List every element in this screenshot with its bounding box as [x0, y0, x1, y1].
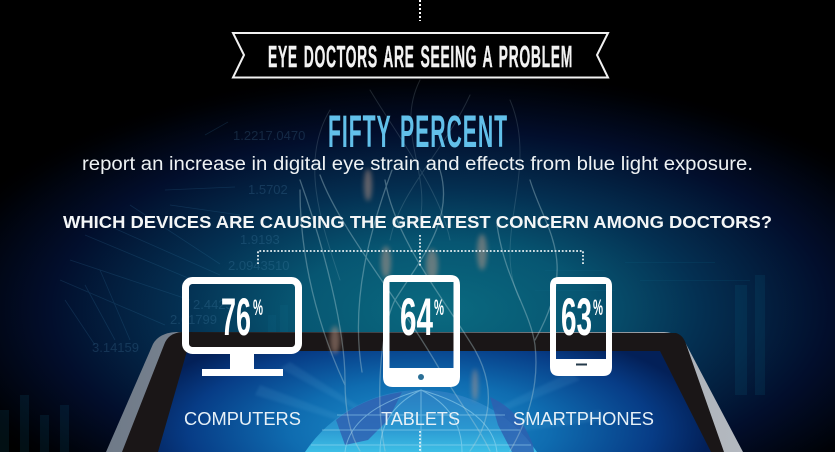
background data rays	[60, 122, 240, 345]
dotted bracket connector	[258, 235, 583, 266]
value: 64%: 64	[400, 288, 433, 347]
body text: report an increase in digital eye strain and effects from blue light exposure.	[82, 154, 753, 175]
label: computers: COMPUTERS	[184, 408, 301, 429]
screen light rays	[255, 362, 605, 445]
icon: tablet	[383, 275, 460, 387]
top dotted connector	[419, 0, 421, 21]
icon: monitor	[186, 280, 298, 376]
background faint numbers: 2.61799	[170, 312, 217, 327]
question heading: WHICH DEVICES ARE CAUSING THE GREATEST CONCERN AMONG DOCTORS?	[63, 212, 772, 232]
background faint numbers: 1.2217.0470	[233, 128, 305, 143]
background data bars	[0, 262, 765, 452]
background faint numbers: 1.5702	[248, 182, 288, 197]
label: smartphones: SMARTPHONES	[513, 408, 654, 429]
tablets stat	[381, 275, 460, 429]
lower dotted connector	[419, 431, 421, 452]
computers stat	[184, 280, 301, 429]
background faint numbers: 1.9193	[240, 232, 280, 247]
glow streaks	[330, 169, 487, 401]
text: FIFTY PERCENT	[328, 106, 508, 157]
background faint numbers: 2.4425	[193, 297, 233, 312]
value: 76%: %	[253, 295, 263, 320]
value: 63%: %	[593, 295, 603, 320]
banner	[233, 33, 608, 78]
tablet black frame	[122, 332, 724, 452]
label: tablets: TABLETS	[381, 408, 460, 429]
icon: smartphone	[550, 277, 612, 376]
large tablet illustration	[106, 332, 743, 452]
smartphones stat	[513, 277, 654, 429]
value: 64%: %	[434, 295, 444, 320]
tablet screen	[158, 351, 711, 452]
background faint numbers	[92, 128, 305, 355]
background faint numbers: 2.0943510	[228, 258, 289, 273]
value: 63%: 63	[561, 288, 592, 347]
banner ribbon	[233, 33, 608, 78]
globe	[305, 390, 537, 452]
light strands	[300, 80, 557, 451]
value: 76%: 76	[221, 288, 251, 347]
background faint numbers: 3.14159	[92, 340, 139, 355]
tablet silver edge	[106, 332, 743, 452]
